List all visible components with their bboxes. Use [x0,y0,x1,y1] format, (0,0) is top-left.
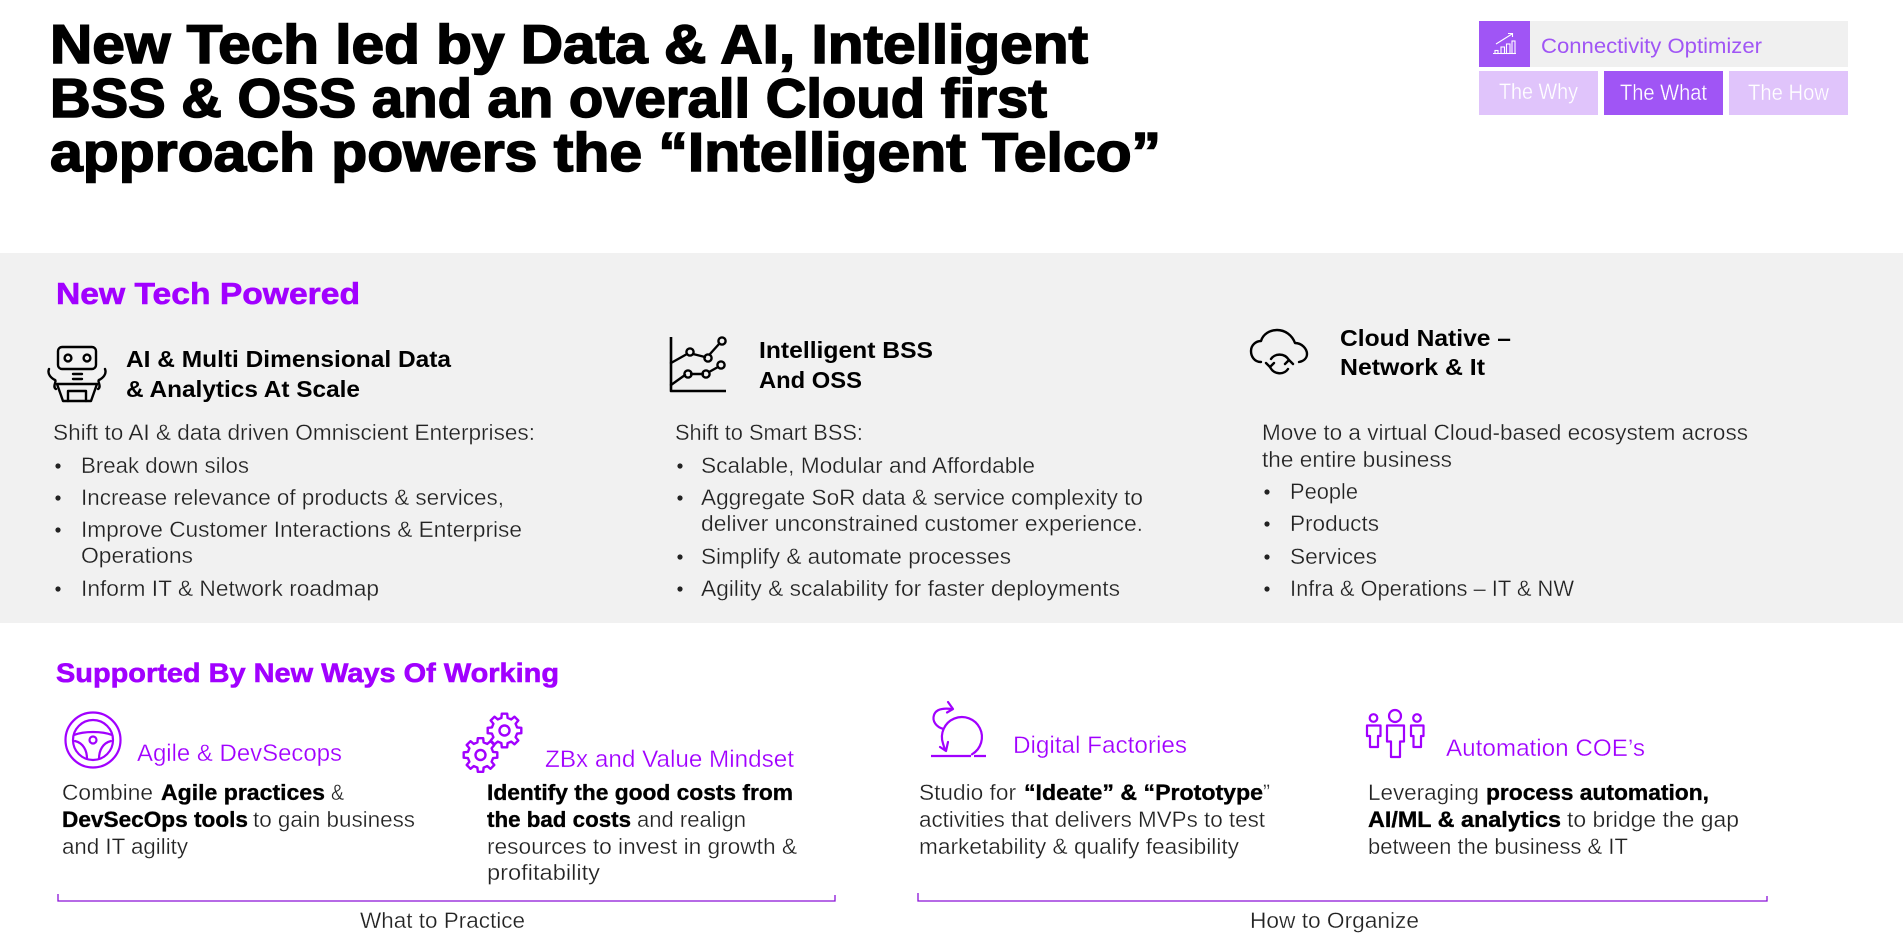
card: zbx and value mindset: the bad costs [487,807,631,832]
column: AI and data [48,346,535,601]
icon: robot [48,347,106,401]
column: cloud native: Cloud Native – [1340,325,1511,351]
card: digital factories: Digital Factories [1013,732,1187,759]
bracket: how to organize [918,893,1767,933]
bracket: what to practice [58,894,835,933]
column: AI and data: Operations [81,543,193,568]
card: zbx and value mindset: profitability [487,860,601,885]
icon: gears [464,714,521,772]
card: automation COEs: to bridge the gap [1567,807,1739,832]
icon: three people [1367,710,1424,757]
navigation: connectivity optimizer tabs [1479,21,1848,115]
column: AI and data: Break down silos [81,453,249,478]
title: BSS & OSS and an overall Cloud first [50,67,1047,129]
column: cloud native: Infra & Operations – IT & NW [1290,576,1575,601]
heading: new tech powered: New Tech Powered [56,276,360,311]
column: cloud native: Move to a virtual Cloud-based ecosystem across [1262,420,1748,445]
card: digital factories: “Ideate” & “Prototype [1024,780,1263,805]
card: agile and devsecops: Agile & DevSecops [137,740,342,767]
navigation: connectivity optimizer tabs: The How [1748,80,1829,105]
column: AI and data: Improve Customer Interactions & Enterprise [81,517,522,542]
card: agile and devsecops: DevSecOps tools [62,807,248,832]
card: digital factories: Studio for [919,780,1017,805]
bracket: how to organize: How to Organize [1250,908,1419,933]
column: intelligent BSS and OSS: Aggregate SoR data & service complexity to [701,485,1143,510]
column: intelligent BSS and OSS: Simplify & automate processes [701,544,1011,569]
card: automation COEs: Leveraging [1368,780,1479,805]
column: AI and data: Shift to AI & data driven Omniscient Enterprises: [53,420,535,445]
column: AI and data: AI & Multi Dimensional Data [126,346,452,372]
bracket: what to practice: What to Practice [360,908,525,933]
icon: steering wheel [66,712,120,768]
navigation: connectivity optimizer tabs: Connectivity Optimizer [1541,35,1762,58]
card: digital factories: marketability & qualify feasibility [919,834,1240,859]
column: cloud native [1251,325,1748,601]
column: AI and data: & Analytics At Scale [126,376,360,402]
icon: loop with arrows [931,702,986,756]
column: cloud native: People [1290,479,1358,504]
card: automation COEs: process automation, [1486,780,1709,805]
card: agile and devsecops: & [331,780,344,805]
title: approach powers the “Intelligent Telco” [50,121,1161,183]
column: AI and data: Increase relevance of products & services, [81,485,504,510]
panel: new tech powered [0,253,1903,623]
column: intelligent BSS and OSS: Scalable, Modular and Affordable [701,453,1035,478]
card: zbx and value mindset [464,714,797,885]
card: agile and devsecops: to gain business [253,807,415,832]
heading: supported by new ways of working: Supported By New Ways Of Working [56,658,559,688]
card: zbx and value mindset: resources to invest in growth & [487,834,797,859]
card: agile and devsecops: and IT agility [62,834,189,859]
column: cloud native: Network & It [1340,354,1485,380]
column: intelligent BSS and OSS: Shift to Smart BSS: [675,420,863,445]
card: agile and devsecops: Combine [62,780,153,805]
column: intelligent BSS and OSS: deliver unconstrained customer experience. [701,511,1143,536]
card: automation COEs: AI/ML & analytics [1368,807,1561,832]
card: zbx and value mindset: Identify the good costs from [487,780,793,805]
column: intelligent BSS and OSS: Intelligent BSS [759,337,933,363]
column: AI and data: Inform IT & Network roadmap [81,576,379,601]
title: New Tech led by Data & AI, Intelligent [50,13,1088,75]
card: digital factories: activities that delivers MVPs to test [919,807,1266,832]
icon: line chart [671,337,726,391]
column: intelligent BSS and OSS: Agility & scalability for faster deployments [701,576,1120,601]
card: automation COEs: between the business & IT [1368,834,1628,859]
card: agile and devsecops: Agile practices [161,780,325,805]
column: cloud native: Services [1290,544,1377,569]
card: zbx and value mindset: and realign [637,807,746,832]
column: cloud native: the entire business [1262,447,1452,472]
icon: cloud with refresh arrows [1251,330,1307,373]
card: automation COEs [1367,710,1739,859]
navigation: connectivity optimizer tabs: The What [1620,80,1707,105]
card: zbx and value mindset: ZBx and Value Mindset [545,746,794,773]
card: digital factories [919,702,1270,859]
icon: rising bar chart [1479,21,1530,67]
card: automation COEs: Automation COE’s [1446,735,1645,762]
card: digital factories: ” [1263,780,1270,805]
column: cloud native: Products [1290,511,1379,536]
card: agile and devsecops [62,712,415,859]
title [50,13,1161,183]
navigation: connectivity optimizer tabs: The Why [1499,79,1578,104]
column: intelligent BSS and OSS [671,337,1143,601]
column: intelligent BSS and OSS: And OSS [759,367,862,393]
